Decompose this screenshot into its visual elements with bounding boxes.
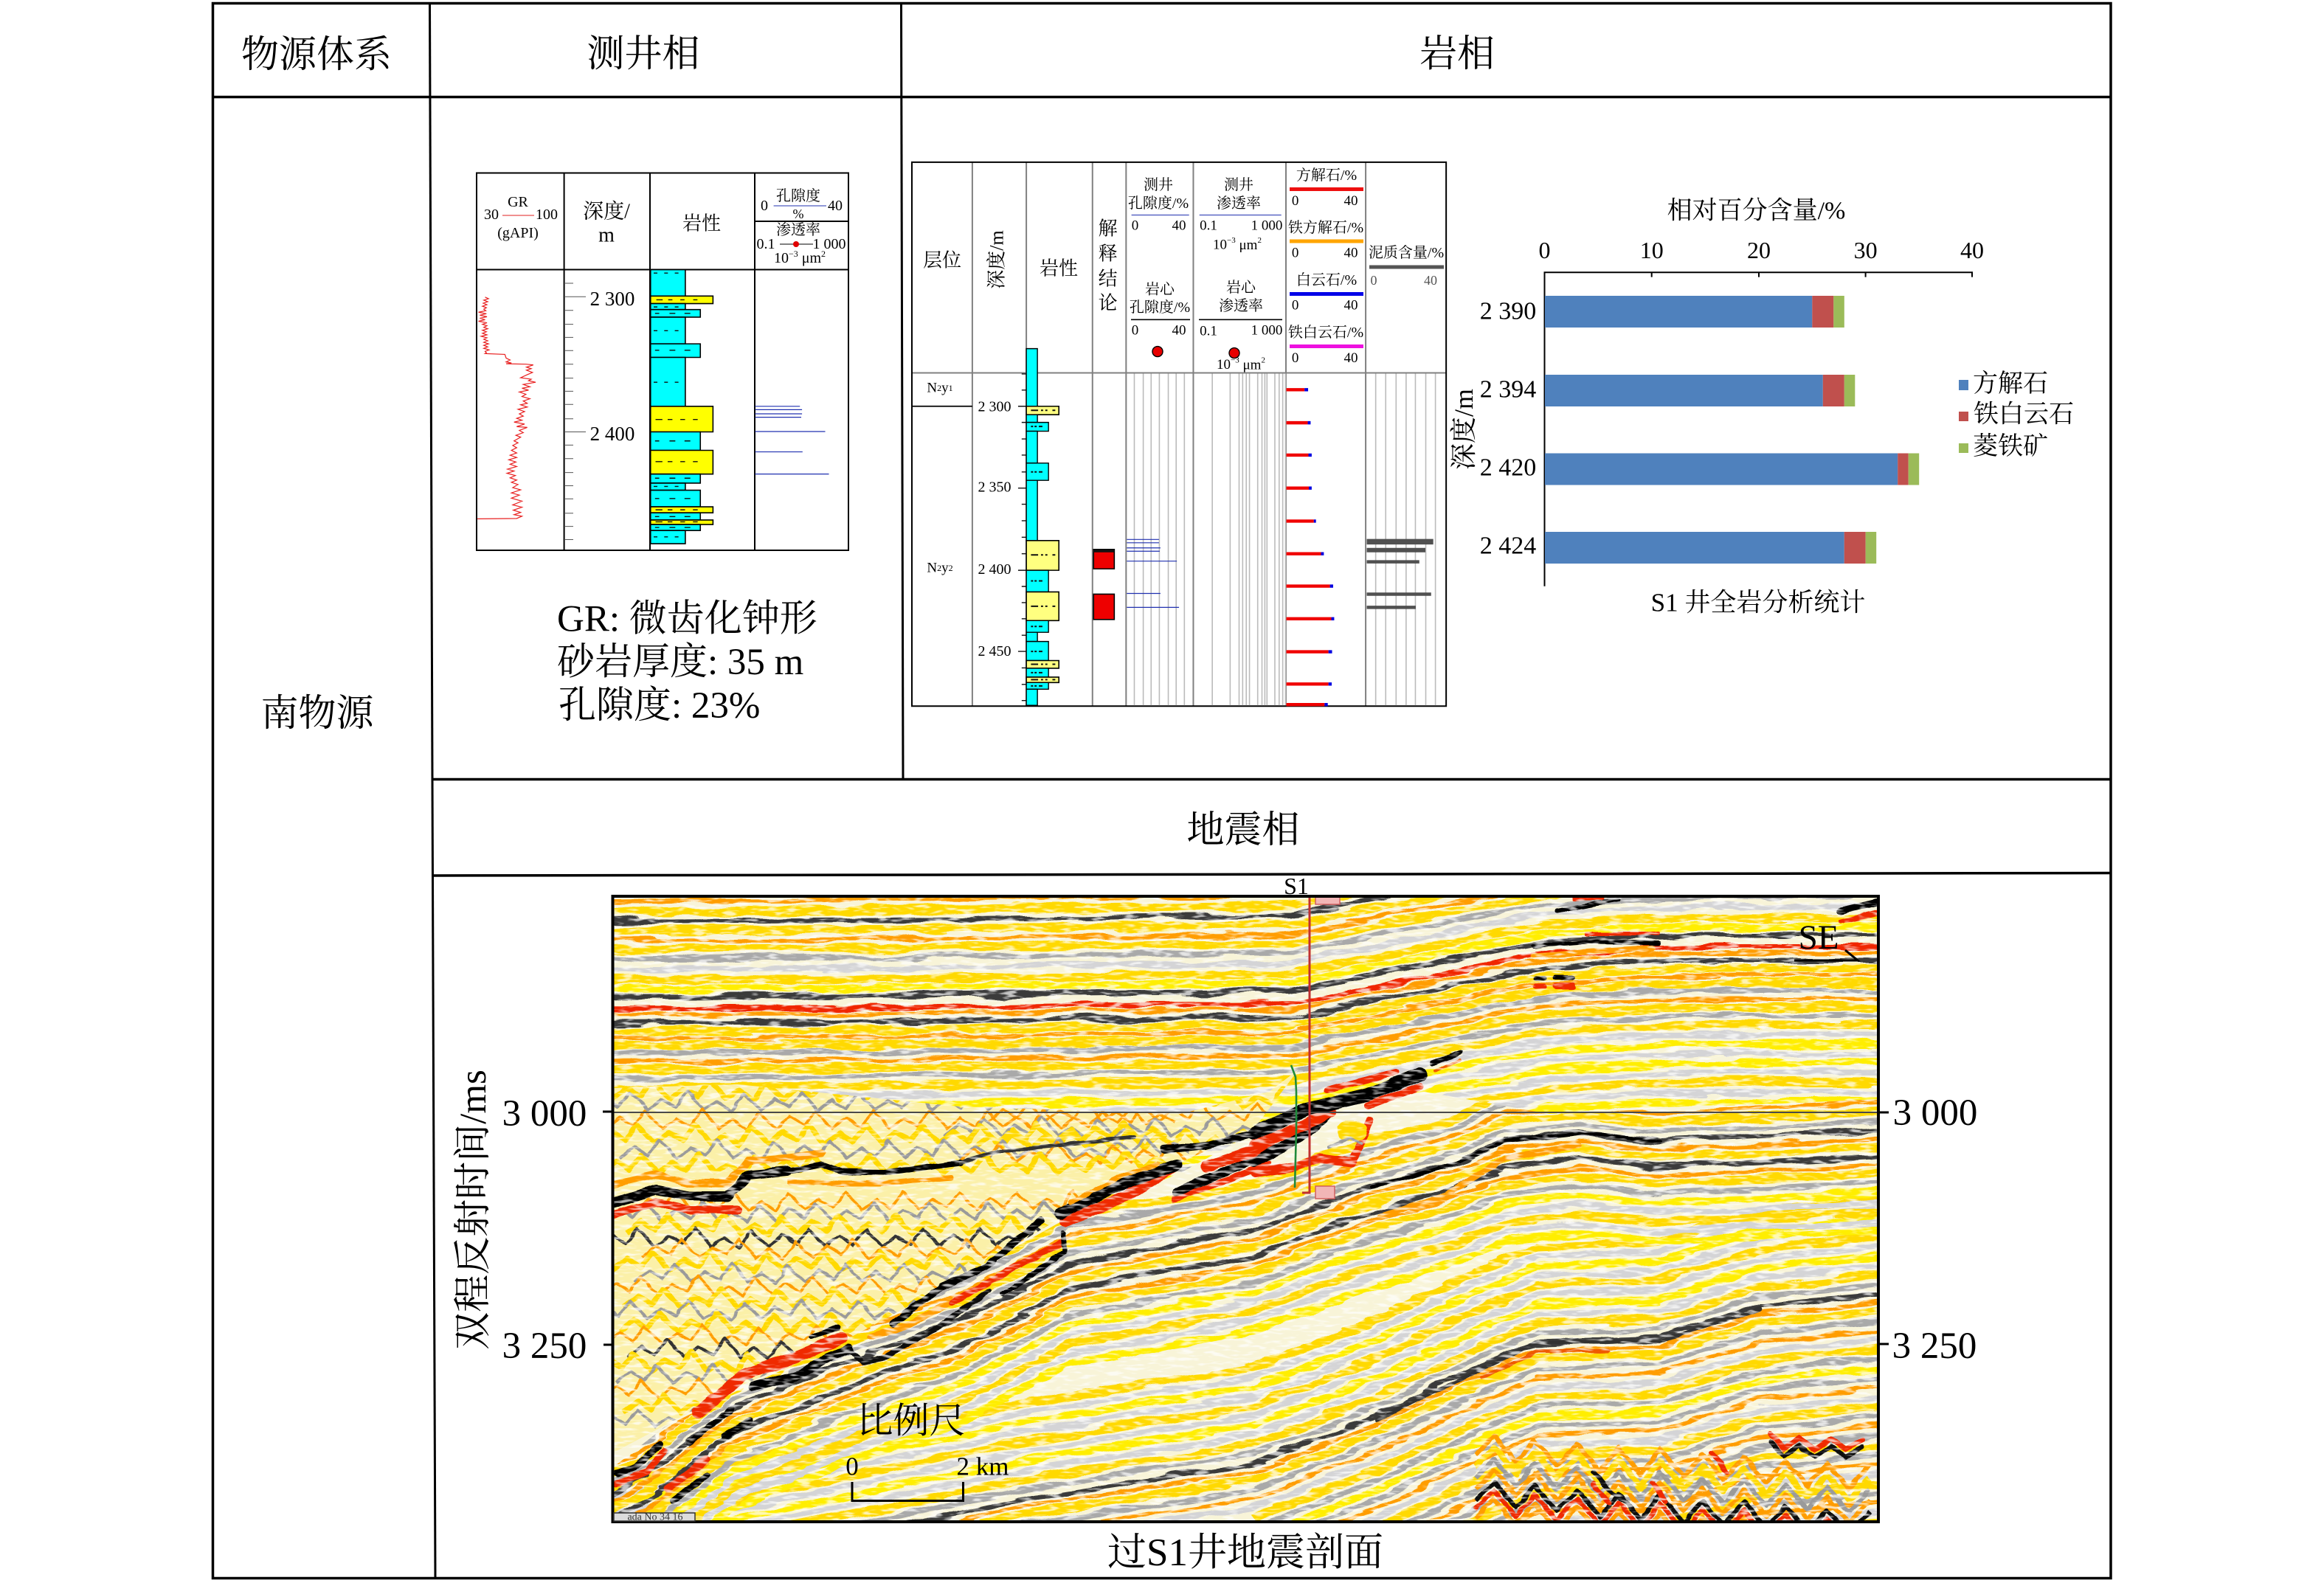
y axis labels: 2 420 [1480, 454, 1536, 481]
heading: 南物源: 南物源 [260, 693, 374, 735]
strong horizons [613, 899, 1878, 1501]
porosity and permeability header: 0 [761, 198, 768, 214]
GR header: 30 [484, 207, 499, 223]
mineral headers: 0 [1292, 298, 1298, 313]
mineral headers: 白云石/% [1296, 271, 1357, 288]
clay content header: 泥质含量/% [1369, 244, 1444, 261]
porosity and permeability header: −3 [789, 249, 798, 259]
chart caption: S1 井全岩分析统计 [1651, 589, 1865, 617]
mineral headers: 0 [1292, 350, 1298, 366]
permeability headers: 1 000 [1251, 218, 1282, 233]
porosity and permeability header: 渗透率 [776, 221, 820, 238]
permeability headers: μm [1239, 357, 1262, 373]
upper flat reflectors [614, 898, 1877, 1203]
scale bar: 比例尺 [857, 1400, 966, 1441]
porosity headers: 测井 [1144, 176, 1173, 193]
x axis labels: 0 [1539, 237, 1551, 263]
permeability headers: 0.1 [1200, 218, 1217, 233]
x axis labels: 10 [1640, 237, 1664, 263]
depth header: m [598, 224, 615, 246]
y axis title: 深度/m [1449, 389, 1479, 470]
text block: well log summary: GR: 微齿化钟形 [557, 599, 817, 640]
GR header [484, 194, 558, 241]
permeability headers: −3 [1231, 356, 1239, 364]
left axis labels: 3 000 [502, 1093, 587, 1135]
right axis labels: 3 000 [1893, 1092, 1977, 1134]
depth labels: 2 450 [978, 643, 1011, 659]
reference time line at 3000 ms [612, 1112, 1878, 1113]
porosity and permeability header: μm [798, 250, 821, 266]
column headings: 解 [1099, 218, 1118, 239]
lithology column [651, 270, 713, 544]
permeability lines [755, 406, 829, 474]
mineral headers [1288, 167, 1363, 366]
composite log body [1018, 349, 1436, 705]
permeability headers: 10 [1217, 357, 1231, 373]
column headings: 论 [1099, 292, 1118, 314]
column headings [923, 218, 1118, 314]
GR header: GR [508, 194, 529, 210]
chaotic left zone [614, 1070, 1298, 1452]
mineral headers: 铁方解石/% [1288, 219, 1363, 236]
mottled speckle [612, 896, 1878, 1522]
porosity and permeability header: 2 [821, 249, 826, 259]
clay content header [1369, 244, 1444, 288]
depth labels [590, 288, 634, 445]
mineral headers: 0 [1292, 245, 1298, 261]
permeability headers: 0.1 [1200, 323, 1217, 339]
GR curve [477, 297, 536, 519]
GR header: (gAPI) [497, 225, 539, 241]
heading: 地震相: 地震相 [1186, 810, 1300, 851]
porosity and permeability header [757, 187, 845, 266]
porosity headers [1128, 176, 1190, 357]
depth header: 深度/ [583, 199, 630, 223]
y axis labels [1480, 298, 1536, 559]
legend: 铁白云石 [1974, 400, 2074, 428]
heading: 物源体系: 物源体系 [241, 35, 392, 76]
mineral headers: 铁白云石/% [1288, 324, 1363, 341]
mineral headers: 40 [1344, 350, 1358, 366]
mineral headers: 方解石/% [1296, 167, 1357, 184]
porosity headers: 40 [1172, 218, 1186, 233]
permeability headers: μm [1236, 238, 1258, 252]
text block: well log summary: 孔隙度: 23% [558, 685, 760, 727]
heading: 测井相: 测井相 [587, 34, 700, 75]
porosity headers: 0 [1132, 323, 1138, 338]
clay content header: 40 [1424, 273, 1437, 288]
bar chart: S1 whole rock analysis [1449, 196, 2074, 617]
depth labels: 2 300 [590, 288, 634, 310]
porosity and permeability header: 1 000 [813, 236, 845, 252]
porosity and permeability header: 0.1 [757, 236, 775, 252]
x axis labels: 20 [1747, 237, 1771, 263]
axes [1545, 272, 1972, 586]
composite log frame [912, 162, 1446, 706]
clay content header: 0 [1371, 273, 1377, 288]
legend: 方解石 [1973, 370, 2048, 398]
permeability headers: 1 000 [1251, 323, 1282, 338]
well label S1: S1 [1284, 873, 1309, 899]
porosity and permeability header: 孔隙度 [776, 187, 820, 204]
compass label SE with arrow: SE [1799, 918, 1839, 957]
lower dipping reflectors [614, 1092, 1877, 1520]
permeability headers: −3 [1227, 236, 1236, 245]
column headings: 结 [1099, 269, 1118, 289]
scale bar [845, 1400, 1009, 1500]
depth ticks [565, 283, 586, 540]
depth labels: 2 350 [978, 479, 1011, 496]
legend [1959, 370, 2074, 460]
column headings: 层位 [923, 249, 961, 271]
left axis labels [502, 1093, 612, 1367]
depth labels: 2 400 [590, 423, 634, 445]
porosity and permeability header: 40 [828, 198, 843, 214]
y axis title: two-way time: 双程反射时间/ms [453, 1070, 494, 1350]
caption: seismic section through S1: 过S1井地震剖面 [1107, 1531, 1383, 1574]
mineral headers: 40 [1344, 298, 1358, 313]
panel: lithofacies well log [912, 162, 1446, 706]
y axis labels: 2 394 [1480, 376, 1536, 403]
permeability headers: 渗透率 [1219, 297, 1263, 314]
stacked bars [1545, 296, 1919, 564]
column headings: 释 [1099, 243, 1118, 264]
text block: well log summary [557, 599, 817, 727]
column headings: 岩性 [1040, 258, 1078, 279]
permeability headers [1199, 176, 1282, 373]
legend: 菱铁矿 [1973, 432, 2048, 460]
seismic image frame [612, 896, 1878, 1522]
permeability headers: 渗透率 [1217, 195, 1261, 212]
permeability headers: 岩心 [1226, 279, 1256, 296]
permeability headers: 2 [1261, 356, 1265, 364]
mineral headers: 0 [1292, 193, 1298, 209]
porosity headers: 40 [1172, 323, 1186, 338]
permeability headers: 10 [1213, 238, 1227, 252]
depth labels: 2 300 [978, 399, 1011, 415]
well track S1 [1291, 896, 1340, 1199]
text block: well log summary: 砂岩厚度: 35 m [557, 642, 803, 683]
well log table frame [477, 173, 848, 550]
bottom right chaotic strong reflectors [1473, 1431, 1872, 1520]
x axis labels: 30 [1854, 237, 1878, 263]
y axis labels: 2 424 [1480, 533, 1536, 559]
heading: 岩相: 岩相 [1419, 34, 1495, 75]
column headings: 深度/m [986, 230, 1008, 289]
scale bar: 2 km [957, 1452, 1009, 1481]
porosity headers: 0 [1132, 218, 1138, 233]
mineral headers: 40 [1344, 193, 1358, 209]
x axis labels [1539, 237, 1984, 263]
depth labels [978, 399, 1011, 659]
right axis labels [1878, 1092, 1977, 1367]
compass label SE with arrow [1794, 918, 1858, 960]
stratigraphic labels: N2y2 [927, 561, 953, 575]
stratigraphic labels [927, 381, 953, 575]
line number tag: ada No 34 16 [627, 1512, 683, 1523]
line number tag [614, 1512, 695, 1523]
porosity and permeability header: % [792, 207, 804, 221]
panel: well log facies [477, 173, 848, 550]
GR header: 100 [536, 207, 558, 223]
chart title top: 相对百分含量/% [1667, 196, 1845, 224]
stratigraphic labels: N2y1 [927, 381, 953, 395]
y axis labels: 2 390 [1480, 298, 1536, 325]
right axis labels: 3 250 [1892, 1326, 1977, 1367]
porosity and permeability header: 10 [774, 250, 789, 266]
porosity headers: 孔隙度/% [1128, 195, 1189, 212]
scale bar: 0 [845, 1452, 859, 1481]
left axis labels: 3 250 [502, 1326, 587, 1367]
seismic section image [614, 898, 1877, 1520]
depth labels: 2 400 [978, 561, 1011, 578]
porosity headers: 孔隙度/% [1130, 299, 1190, 316]
depth header [583, 199, 630, 246]
lithology header: 岩性 [682, 212, 721, 235]
mineral headers: 40 [1344, 245, 1358, 261]
permeability headers: 测井 [1224, 176, 1253, 193]
permeability headers: 2 [1257, 236, 1262, 245]
x axis labels: 40 [1960, 237, 1984, 263]
porosity headers: 岩心 [1145, 280, 1175, 298]
